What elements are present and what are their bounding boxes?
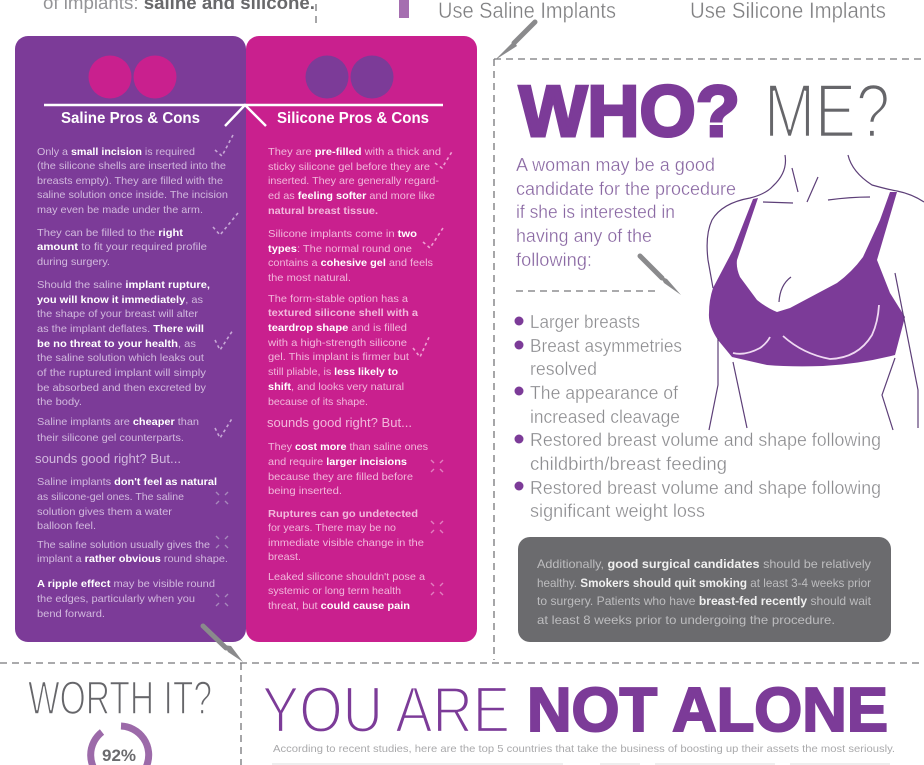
panel: silicone pros and cons: [246, 36, 477, 642]
saline body text: be no threat to your health , as: [37, 338, 196, 350]
callout: good surgical candidates: [518, 537, 891, 642]
silicone body text: They cost more than saline ones: [268, 441, 428, 453]
silicone body text: types: The normal round one: [268, 243, 412, 255]
candidate intro paragraph: having any of the: [516, 225, 652, 246]
title: who me: WHO?: [519, 72, 740, 152]
candidate intro paragraph: A woman may be a good: [516, 154, 715, 175]
saline body text: A ripple effect may be visible round: [37, 578, 215, 590]
silicone body text: Silicone implants come in two: [268, 228, 417, 240]
saline body text: bend forward.: [37, 608, 105, 620]
saline body text: Saline implants don't feel as natural: [37, 476, 217, 488]
title: you are not alone: YOU ARE: [262, 673, 510, 746]
callout: good surgical candidates: Additionally, good surgical candidates should be relatively: [537, 557, 871, 571]
bullet markers: [514, 316, 524, 490]
silicone body text: natural breast tissue.: [268, 205, 378, 217]
legend swatch: [399, 0, 409, 18]
silicone body text: inserted. They are generally regard-: [268, 175, 440, 187]
candidate bullet list: Breast asymmetries: [530, 335, 682, 356]
icons: silicone check marks: [413, 150, 453, 357]
silicone body text: [267, 146, 441, 612]
silicone heading: Silicone Pros & Cons: [277, 110, 429, 127]
silicone body text: Ruptures can go undetected: [268, 508, 418, 520]
silicone body text: gel. This implant is firmer but: [268, 351, 409, 363]
silicone body text: teardrop shape and is filled: [268, 322, 407, 334]
saline body text: as the implant deflates. There will: [37, 323, 204, 335]
silicone body text: systemic or long term health: [268, 585, 401, 597]
silicone body text: the most natural.: [268, 272, 351, 284]
silicone body text: sticky silicone gel before they are: [268, 161, 430, 173]
icon: scalpel panel bottom: [203, 626, 243, 662]
candidate bullet list: increased cleavage: [530, 406, 680, 427]
title: you are not alone: NOT ALONE: [527, 676, 888, 745]
silicone body text: breast.: [268, 551, 301, 563]
candidate bullet list: resolved: [530, 358, 597, 379]
candidate bullet list: childbirth/breast feeding: [530, 453, 727, 474]
silicone body text: being inserted.: [268, 485, 342, 497]
callout: good surgical candidates: healthy. Smokers should quit smoking at least 3-4 weeks prior: [537, 576, 871, 590]
saline body text: (the silicone shells are inserted into the: [37, 160, 226, 172]
callout: good surgical candidates: at least 8 weeks prior to undergoing the procedure.: [537, 613, 835, 627]
candidate intro paragraph: following:: [516, 249, 592, 270]
candidate intro paragraph: if she is interested in: [516, 201, 675, 222]
saline body text: They can be filled to the right: [37, 227, 184, 239]
silicone body text: because they are filled before: [268, 471, 413, 483]
saline body text: breasts empty). They are filled with the: [37, 175, 223, 187]
icon: silicone circles: [306, 56, 394, 98]
silicone body text: Leaked silicone shouldn't pose a: [268, 571, 425, 583]
candidate bullet list: Restored breast volume and shape following: [530, 477, 881, 498]
saline body text: the shape of your breast will alter: [37, 308, 199, 320]
silicone body text: and require larger incisions: [268, 456, 407, 468]
chart: 92 percent ring: 92%: [102, 746, 136, 765]
icon: scalpel top: [495, 22, 535, 60]
saline body text: [35, 146, 228, 620]
heading: worth it: WORTH IT?: [28, 671, 212, 724]
icon: saline circles: [88, 56, 176, 98]
candidate intro paragraph: candidate for the procedure: [516, 178, 736, 199]
icon: scalpel candidate: [640, 256, 681, 295]
silicone body text: ed as feeling softer and more like: [268, 190, 435, 202]
saline body text: The saline solution usually gives the: [37, 539, 210, 551]
icons: silicone cross marks: [431, 460, 443, 595]
silicone body text: textured silicone shell with a: [268, 307, 418, 319]
silicone body text: with a high-strength silicone: [267, 337, 407, 349]
saline body text: solution gives them a water: [37, 506, 173, 518]
illustration: bra on torso: [707, 155, 924, 430]
saline body text: implant a rather obvious round shape.: [37, 553, 228, 565]
candidate bullet list: The appearance of: [530, 382, 679, 403]
saline body text: be absorbed and then excreted by: [37, 382, 207, 394]
saline body text: the body.: [37, 396, 82, 408]
saline body text: their silicone gel counterparts.: [37, 432, 184, 444]
callout: good surgical candidates: to surgery. Patients who have breast-fed recently should wait: [537, 594, 872, 608]
silicone body text: for years. There may be no: [268, 522, 396, 534]
title: who me: [519, 69, 890, 154]
silicone body text: They are pre-filled with a thick and: [268, 146, 441, 158]
heading divider with chevron: [44, 105, 443, 126]
silicone body text: sounds good right? But...: [267, 415, 412, 430]
saline body text: sounds good right? But...: [35, 451, 181, 466]
saline body text: the edges, particularly when you: [37, 593, 195, 605]
silicone body text: contains a cohesive gel and feels: [268, 257, 433, 269]
silicone body text: shift, and looks very natural: [268, 381, 404, 393]
candidate bullet list: Restored breast volume and shape following: [530, 429, 881, 450]
candidate bullet list: [514, 311, 881, 521]
candidate bullet list: Larger breasts: [530, 311, 640, 332]
silicone body text: because of its shape.: [268, 396, 368, 408]
title: who me: ME?: [764, 69, 890, 154]
saline body text: during surgery.: [37, 256, 110, 268]
saline body text: Should the saline implant rupture,: [37, 279, 210, 291]
saline body text: Saline implants are cheaper than: [37, 416, 199, 428]
saline body text: saline solution once inside. The incision: [37, 189, 228, 201]
saline body text: amount to fit your required profile: [37, 241, 207, 253]
silicone body text: immediate visible change in the: [268, 537, 424, 549]
icons: saline check marks: [213, 135, 238, 438]
saline body text: balloon feel.: [37, 520, 96, 532]
silicone body text: still pliable, is less likely to: [268, 366, 398, 378]
silicone body text: threat, but could cause pain: [268, 600, 410, 612]
countries intro text: According to recent studies, here are the top 5 countries that take the business of boosting up their assets the most seriously.: [273, 743, 895, 755]
panel: saline pros and cons: [15, 36, 246, 642]
saline body text: as silicone-gel ones. The saline: [37, 491, 184, 503]
saline heading: Saline Pros & Cons: [61, 110, 200, 127]
icons: saline cross marks: [216, 492, 228, 606]
saline body text: the saline solution which leaks out: [37, 352, 204, 364]
chart: 92 percent ring: [91, 726, 149, 765]
saline body text: may even be made under the arm.: [37, 204, 203, 216]
saline body text: you will know it immediately , as: [37, 294, 203, 306]
silicone body text: The form-stable option has a: [268, 293, 408, 305]
candidate intro paragraph: [516, 154, 736, 270]
saline body text: Only a small incision is required: [37, 146, 195, 158]
saline body text: of the ruptured implant will simply: [37, 367, 207, 379]
candidate bullet list: significant weight loss: [530, 500, 705, 521]
title: you are not alone: [262, 673, 888, 746]
